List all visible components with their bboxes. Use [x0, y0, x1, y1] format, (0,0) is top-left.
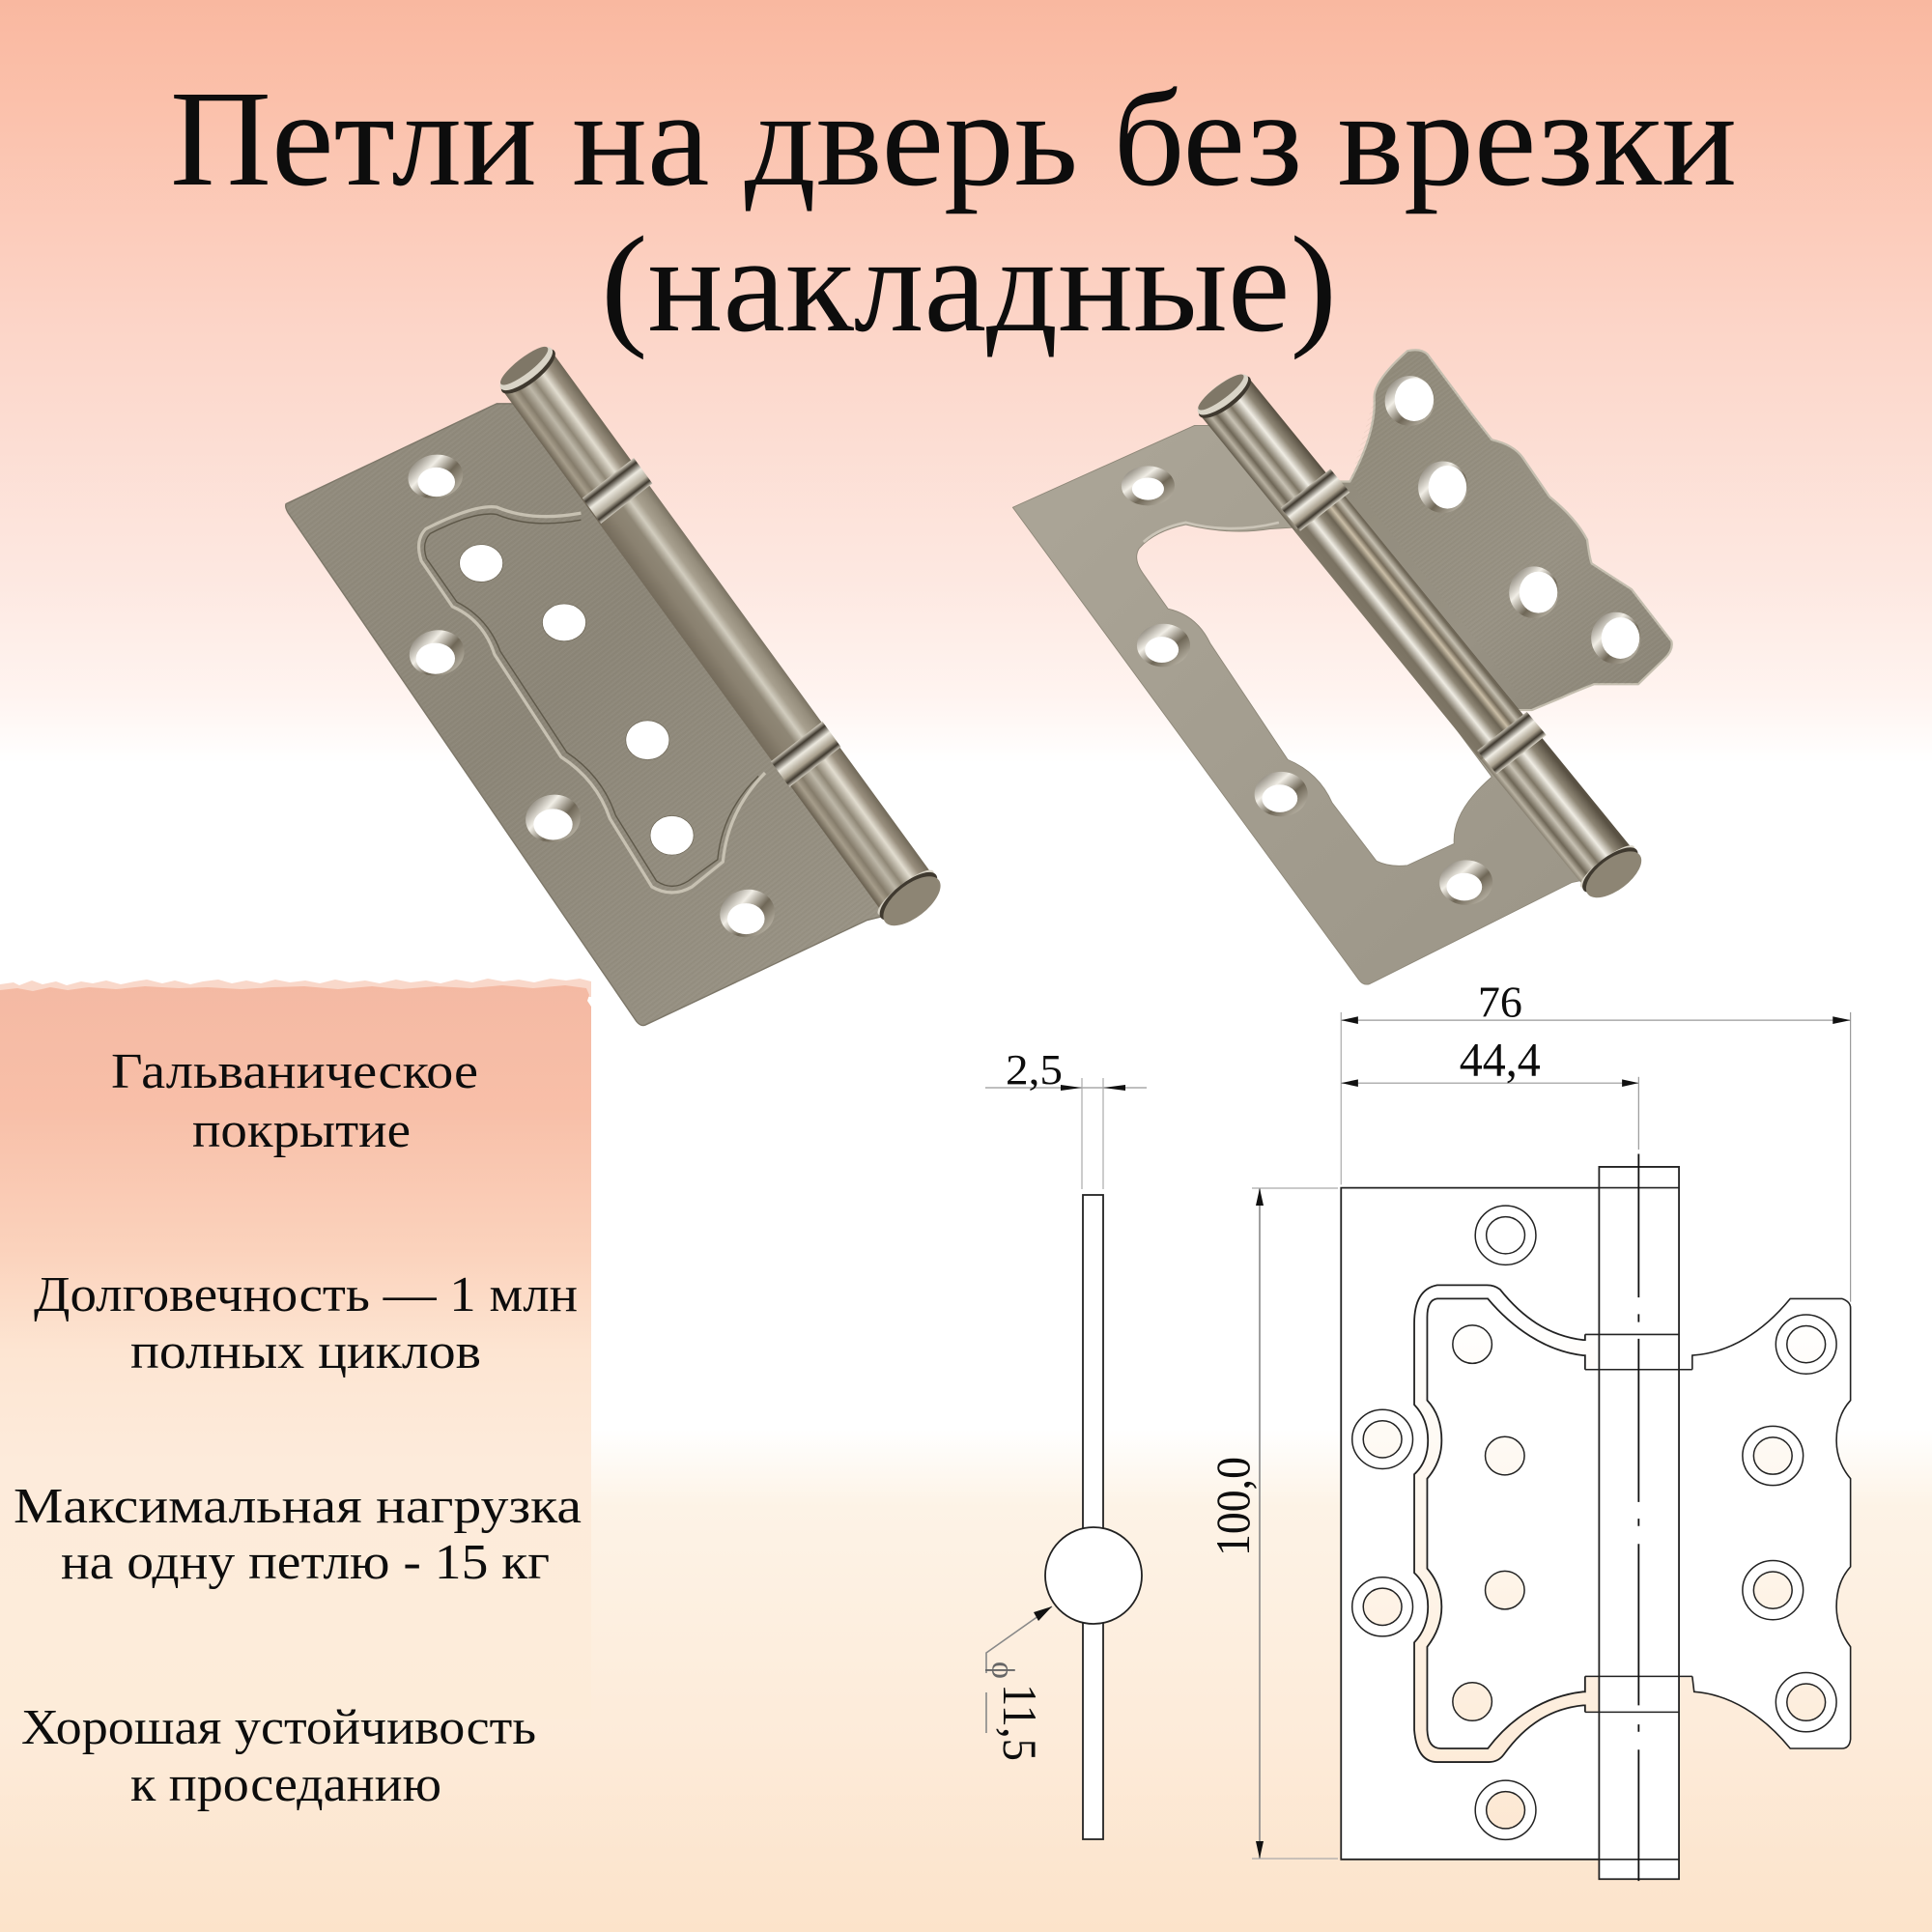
feature: coating: Гальваническое: [111, 1044, 478, 1099]
hinge knuckle pin: [1199, 377, 1636, 891]
photo: open hinge: [1012, 350, 1672, 984]
bottom pin cap: [873, 864, 950, 935]
upper collar: [582, 458, 652, 524]
feature: durability: полных циклов: [130, 1324, 481, 1379]
dimension 100,0: 100,0: [1206, 1457, 1260, 1556]
title: [170, 62, 1737, 360]
dimension 44,4: [1341, 1033, 1638, 1150]
feature: max load: [14, 1479, 582, 1590]
feature: durability: [34, 1267, 578, 1379]
wing fill: [1679, 1298, 1851, 1748]
feature: sag resistance: [21, 1700, 536, 1812]
frame rim highlight: [1144, 523, 1279, 542]
feature: coating: [111, 1044, 478, 1158]
inner leaf fill: [1427, 1298, 1600, 1748]
countersunk screw holes: [1352, 1206, 1836, 1839]
feature: max load: Максимальная нагрузка: [14, 1479, 582, 1534]
hinge wing: [1332, 350, 1672, 710]
embossed channel fill: [1414, 1285, 1600, 1762]
dimension 76: 76: [1478, 977, 1522, 1026]
dimension diameter 11,5: 11,5: [993, 1684, 1047, 1761]
frame screw holes: [1122, 466, 1492, 905]
lower collar: [771, 722, 841, 787]
hinge plate: [286, 404, 900, 1026]
hinge frame leaf: [1012, 425, 1603, 984]
plain through holes: [460, 545, 694, 855]
wing outline: [1692, 1298, 1851, 1748]
feature: max load: на одну петлю - 15 кг: [61, 1535, 550, 1590]
upper collar: [1281, 469, 1350, 531]
dimension diameter 11,5: ϕ: [984, 1662, 1020, 1679]
feature: sag resistance: к проседанию: [130, 1757, 441, 1812]
embossed inner leaf outline: [419, 507, 765, 893]
hinge knuckle pin: [503, 353, 934, 915]
title: Петли на дверь без врезки: [170, 62, 1737, 214]
technical drawing: side view: [984, 1046, 1338, 1859]
panel: features background: [0, 979, 591, 1719]
dimension 76: [1341, 977, 1851, 1302]
top pin cap: [494, 339, 561, 401]
title: (накладные): [601, 208, 1337, 360]
feature: durability: Долговечность — 1 млн: [34, 1267, 578, 1322]
dimension 100,0: [1206, 1188, 1338, 1859]
barrel lines: [1585, 1154, 1692, 1881]
top pin cap: [1191, 367, 1257, 425]
plate outline: [1341, 1188, 1600, 1860]
dimension 2,5: 2,5: [1006, 1046, 1063, 1094]
lower collar: [1477, 712, 1547, 774]
dimension 44,4: 44,4: [1460, 1033, 1541, 1087]
wing screw holes: [1385, 376, 1641, 664]
dimension 2,5: [985, 1046, 1147, 1189]
channel inner edge: [1427, 1298, 1585, 1748]
photo: closed hinge: [286, 339, 950, 1026]
feature: sag resistance: Хорошая устойчивость: [21, 1700, 536, 1755]
countersunk screw holes: [406, 451, 778, 941]
channel outer edge: [1414, 1285, 1585, 1762]
technical drawing: front view: [1341, 977, 1851, 1881]
hinge barrel: [1599, 1167, 1679, 1879]
features text: [14, 1044, 582, 1812]
side view hinge profile: [1045, 1195, 1142, 1839]
feature: coating: покрытие: [192, 1103, 411, 1158]
plain holes: [1453, 1325, 1524, 1720]
bottom pin cap: [1576, 839, 1650, 907]
dimension diameter 11,5: [984, 1606, 1052, 1761]
